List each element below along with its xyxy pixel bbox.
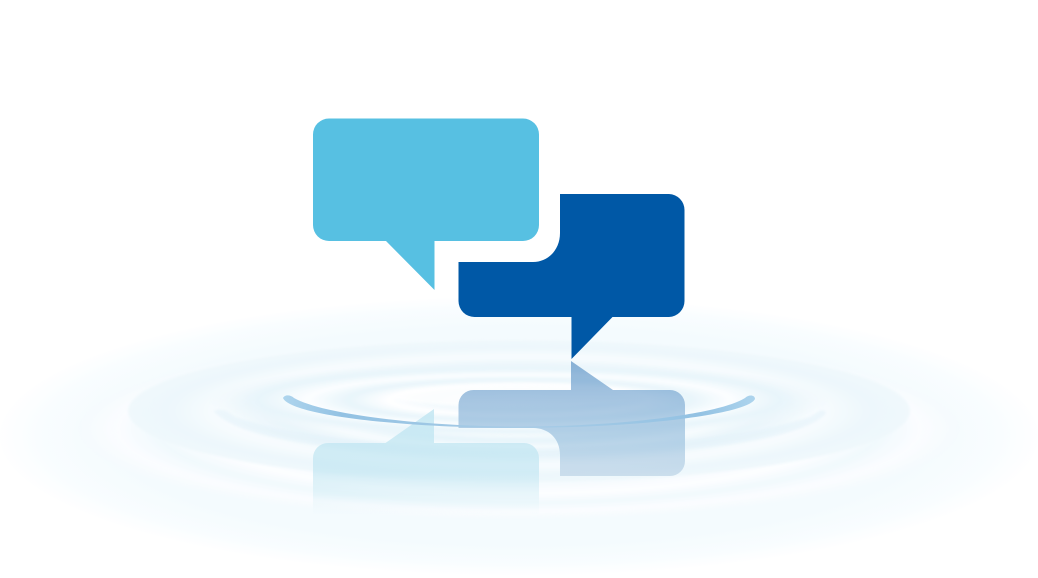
speech bubble: dark blue	[458, 194, 684, 359]
reflection: light blue bubble	[313, 409, 539, 514]
water ripples	[0, 297, 1038, 575]
faint ripple arc: outer	[214, 410, 826, 456]
reflection: dark blue bubble	[458, 361, 685, 476]
speech bubble: light blue	[313, 118, 539, 290]
ripple arc around the drop point	[283, 395, 755, 428]
